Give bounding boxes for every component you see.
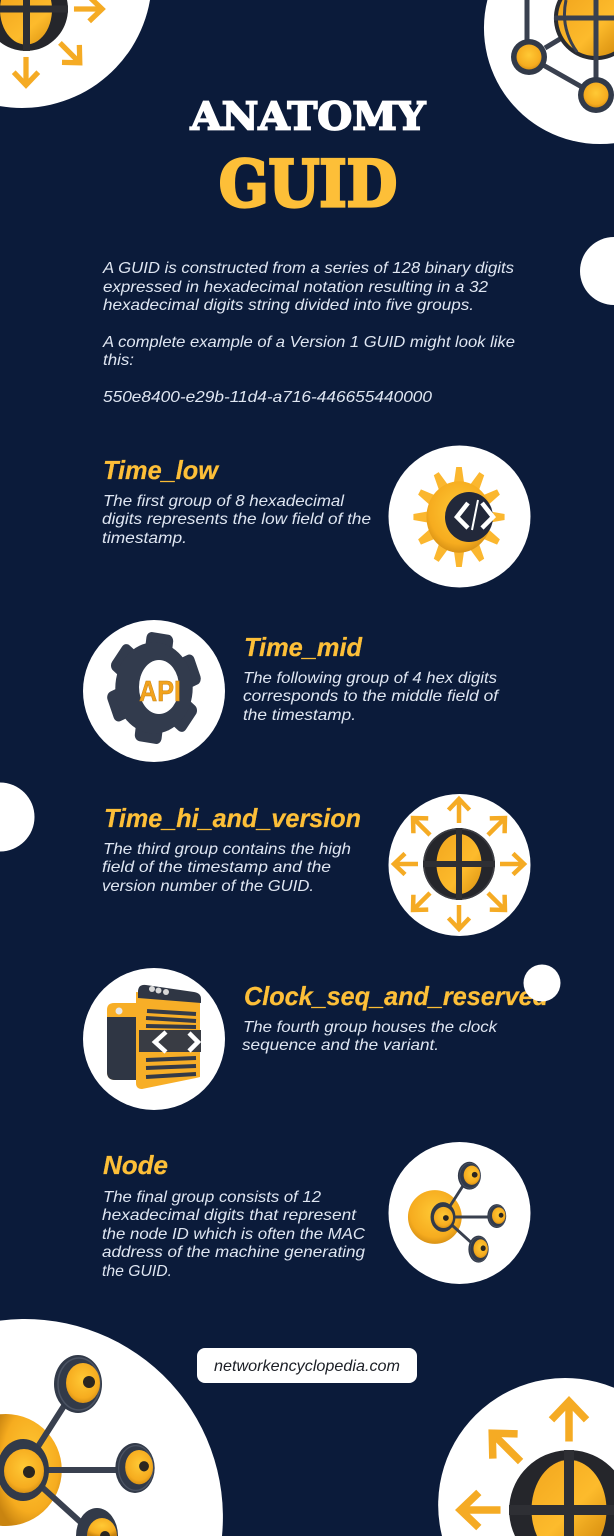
- description: Time_mid: corresponds to the middle field of: [243, 688, 500, 705]
- description: Node: [102, 1189, 365, 1280]
- website link button: [197, 1348, 417, 1383]
- description: Clock_seq_and_reserved: The fourth group houses the clock: [243, 1019, 498, 1036]
- section: Clock_seq_and_reserved: [83, 968, 549, 1110]
- intro text: A complete example of a Version 1 GUID might look like: [102, 334, 515, 351]
- title: ANATOMY: [189, 94, 426, 140]
- description: Time_low: timestamp.: [102, 530, 187, 547]
- section: Time_hi_and_version: [102, 794, 530, 936]
- intro text: 550e8400-e29b-11d4-a716-446655440000: [103, 389, 432, 406]
- icon: code gear: [388, 446, 530, 588]
- description: Clock_seq_and_reserved: [242, 1019, 498, 1054]
- decorative circle: left edge: [0, 782, 34, 852]
- description: Time_hi_and_version: field of the timestamp and the: [102, 859, 331, 876]
- description: Time_mid: The following group of 4 hex digits: [243, 670, 497, 687]
- heading: Time_hi_and_version: Time_hi_and_version: [104, 803, 361, 833]
- intro text: this:: [103, 352, 134, 369]
- description: Time_low: digits represents the low field of the: [102, 511, 371, 528]
- section: Node: [102, 1142, 530, 1284]
- corner decoration: bottom-right globe: [438, 1378, 614, 1536]
- title: GUID: [219, 147, 397, 222]
- section: Time_low: [102, 446, 530, 588]
- section: Time_mid: [83, 620, 500, 762]
- heading: Time_mid: Time_mid: [244, 632, 363, 662]
- description: Node: address of the machine generating: [102, 1244, 365, 1261]
- heading: Time_low: Time_low: [103, 455, 220, 485]
- description: Time_low: [102, 493, 371, 547]
- decorative circle: right edge: [580, 237, 614, 305]
- icon: API gear: [83, 620, 225, 762]
- description: Time_hi_and_version: [102, 841, 351, 895]
- icon: network nodes: [388, 1142, 530, 1284]
- corner decoration: top-right network globe: [484, 0, 614, 144]
- intro text: expressed in hexadecimal notation resulting in a 32: [103, 279, 488, 296]
- icon: API gear: API: [139, 676, 181, 708]
- description: Node: hexadecimal digits that represent: [102, 1207, 357, 1224]
- description: Node: The final group consists of 12: [103, 1189, 321, 1206]
- icon: code window: [83, 968, 225, 1110]
- intro text: A GUID is constructed from a series of 128 binary digits: [102, 260, 514, 277]
- description: Clock_seq_and_reserved: sequence and the variant.: [242, 1037, 439, 1054]
- description: Time_low: The first group of 8 hexadecimal: [103, 493, 344, 510]
- description: Node: the node ID which is often the MAC: [102, 1226, 365, 1243]
- heading: Clock_seq_and_reserved: Clock_seq_and_reserved: [244, 981, 549, 1011]
- intro text: hexadecimal digits string divided into five groups.: [103, 297, 474, 314]
- corner decoration: bottom-left network nodes: [0, 1319, 223, 1536]
- description: Node: the GUID.: [102, 1263, 172, 1280]
- description: Time_hi_and_version: The third group contains the high: [103, 841, 351, 858]
- heading: Node: Node: [103, 1150, 168, 1180]
- description: Time_mid: the timestamp.: [243, 707, 356, 724]
- website link button: networkencyclopedia.com: [214, 1358, 400, 1375]
- intro text: [102, 260, 515, 406]
- icon: globe with arrows: [388, 794, 530, 936]
- description: Time_hi_and_version: version number of the GUID.: [102, 878, 314, 895]
- decorative circle: small overlapping heading: [524, 964, 560, 1002]
- description: Time_mid: [243, 670, 500, 724]
- corner decoration: top-left globe: [0, 0, 150, 108]
- title: [189, 94, 426, 222]
